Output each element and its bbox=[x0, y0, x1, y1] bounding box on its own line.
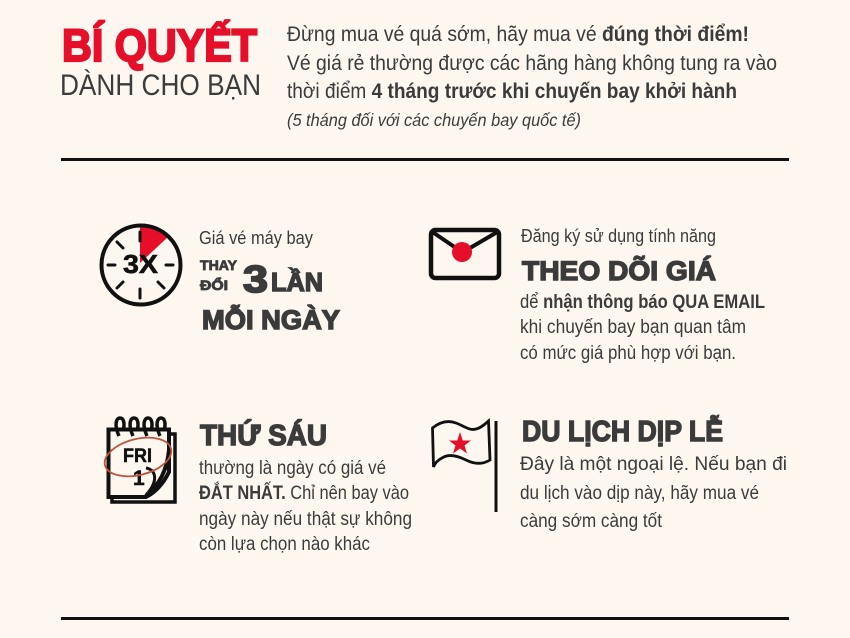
panel: price changes: THAY bbox=[200, 258, 237, 273]
panel: holiday travel: càng sớm càng tốt bbox=[520, 511, 663, 532]
icon: calendar bbox=[101, 418, 175, 502]
panel: holiday travel: Đây là một ngoại lệ. Nếu bạn đi bbox=[520, 454, 787, 475]
panel: Friday: THỨ SÁU bbox=[200, 418, 327, 452]
panel: price changes: LẦN bbox=[271, 268, 323, 297]
panel: Friday bbox=[199, 418, 412, 555]
panel: price tracking bbox=[520, 225, 765, 364]
panel: price tracking: dể nhận thông báo QUA EMAIL bbox=[520, 292, 765, 313]
panel: price changes: MỖI NGÀY bbox=[202, 305, 340, 335]
icon: calendar: FRI bbox=[123, 446, 152, 467]
panel: price tracking: có mức giá phù hợp với bạn. bbox=[520, 343, 736, 364]
icon: clock: 3X bbox=[123, 251, 158, 279]
panel: holiday travel: DU LỊCH DỊP LỄ bbox=[522, 414, 723, 448]
panel: price changes: 3 bbox=[243, 259, 268, 301]
panel: price tracking: Đăng ký sử dụng tính năng bbox=[521, 225, 716, 246]
panel: price tracking: THEO DÕI GIÁ bbox=[522, 256, 716, 286]
panel: price changes bbox=[199, 227, 340, 335]
intro text: (5 tháng đối với các chuyến bay quốc tế) bbox=[287, 110, 581, 130]
intro text: thời điểm 4 tháng trước khi chuyến bay khởi hành bbox=[287, 80, 737, 103]
panel: price changes: Giá vé máy bay bbox=[199, 227, 314, 248]
panel: Friday: còn lựa chọn nào khác bbox=[199, 534, 370, 555]
title: BÍ QUYẾT bbox=[62, 20, 257, 71]
panel: holiday travel: du lịch vào dịp này, hãy mua vé bbox=[520, 483, 759, 504]
panel: Friday: thường là ngày có giá vé bbox=[199, 458, 386, 479]
intro text bbox=[287, 23, 777, 130]
panel: price tracking: khi chuyến bay bạn quan tâm bbox=[520, 317, 746, 338]
title bbox=[60, 20, 261, 102]
icon: calendar: 1 bbox=[133, 467, 145, 490]
icon: envelope bbox=[431, 230, 499, 278]
title: DÀNH CHO BẠN bbox=[60, 69, 261, 102]
panel: price changes: ĐỔI bbox=[200, 278, 228, 293]
panel: holiday travel bbox=[520, 414, 787, 532]
panel: Friday: ĐẮT NHẤT. Chỉ nên bay vào bbox=[199, 482, 409, 504]
icon: flag bbox=[432, 421, 498, 512]
panel: Friday: ngày này nếu thật sự không bbox=[199, 509, 412, 530]
icon: clock bbox=[102, 225, 180, 304]
intro text: Đừng mua vé quá sớm, hãy mua vé đúng thời điểm! bbox=[287, 23, 749, 46]
intro text: Vé giá rẻ thường được các hãng hàng không tung ra vào bbox=[287, 52, 777, 75]
